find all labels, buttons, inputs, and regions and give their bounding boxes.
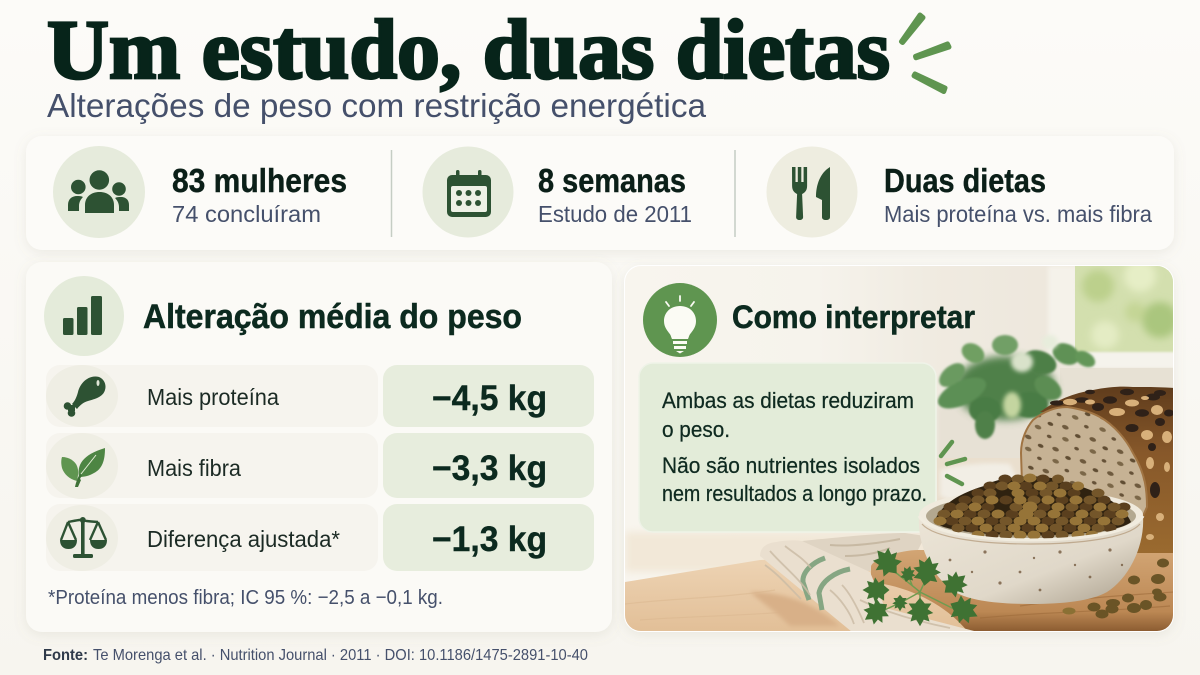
towel back fold [802,533,922,571]
plant [933,335,1098,439]
stat: duration [422,146,692,238]
title: Um estudo, duas dietas [47,3,890,97]
row: more protein [46,365,594,427]
cutting board [871,550,1174,632]
photo: bowl of lentils [919,474,1143,604]
icon: light bulb [643,283,717,357]
icon: leaf [61,448,105,487]
heading: Como interpretar [732,299,975,335]
panel: mean weight change [26,262,612,632]
heading: Alteração média do peso [143,298,522,336]
icon: scales [60,517,107,558]
row: more protein: Mais proteína [147,384,279,410]
icon: drumstick [64,376,106,417]
table [625,560,966,631]
row: more fibre [46,433,594,499]
row: more fibre: −3,3 kg [432,449,547,488]
row: adjusted difference: −1,3 kg [432,520,547,559]
icon: callout accent burst [941,442,965,484]
subtitle: Alterações de peso com restrição energética [47,87,707,124]
callout: Não são nutrientes isolados [662,453,920,478]
stat: participants [53,146,347,238]
stat: diets [766,146,1152,238]
stat: diets: Mais proteína vs. mais fibra [884,201,1152,227]
source line: Fonte: [43,647,88,664]
row: more protein: −4,5 kg [432,379,547,418]
stat: duration: Estudo de 2011 [538,201,692,227]
stat: diets: Duas dietas [884,162,1046,199]
callout: o peso. [662,417,730,442]
photo: kitchen background [625,260,1178,632]
row: adjusted difference [46,504,594,571]
footnote: *Proteína menos fibra; IC 95 %: −2,5 a −0,1 kg. [48,586,443,609]
panel: study facts [26,136,1174,250]
stat: duration: 8 semanas [538,162,686,199]
plant vase [938,408,1025,458]
callout: nem resultados a longo prazo. [662,481,927,506]
row: more fibre: Mais fibra [147,455,241,481]
icon: title accent burst [902,15,949,92]
parsley sprig [862,548,978,626]
row: adjusted difference: Diferença ajustada* [147,526,340,552]
loose lentils [1062,558,1169,618]
stat: participants: 74 concluíram [172,201,321,227]
callout: Ambas as dietas reduziram [662,388,914,413]
rolled towel [760,540,978,632]
panel: how to interpret [624,260,1178,632]
stat: participants: 83 mulheres [172,162,347,199]
bread loaf [1021,387,1174,553]
callout [639,363,936,532]
icon: bar chart [44,276,124,356]
source line: Te Morenga et al. · Nutrition Journal · 2011 · DOI: 10.1186/1475-2891-10-40 [93,647,588,664]
